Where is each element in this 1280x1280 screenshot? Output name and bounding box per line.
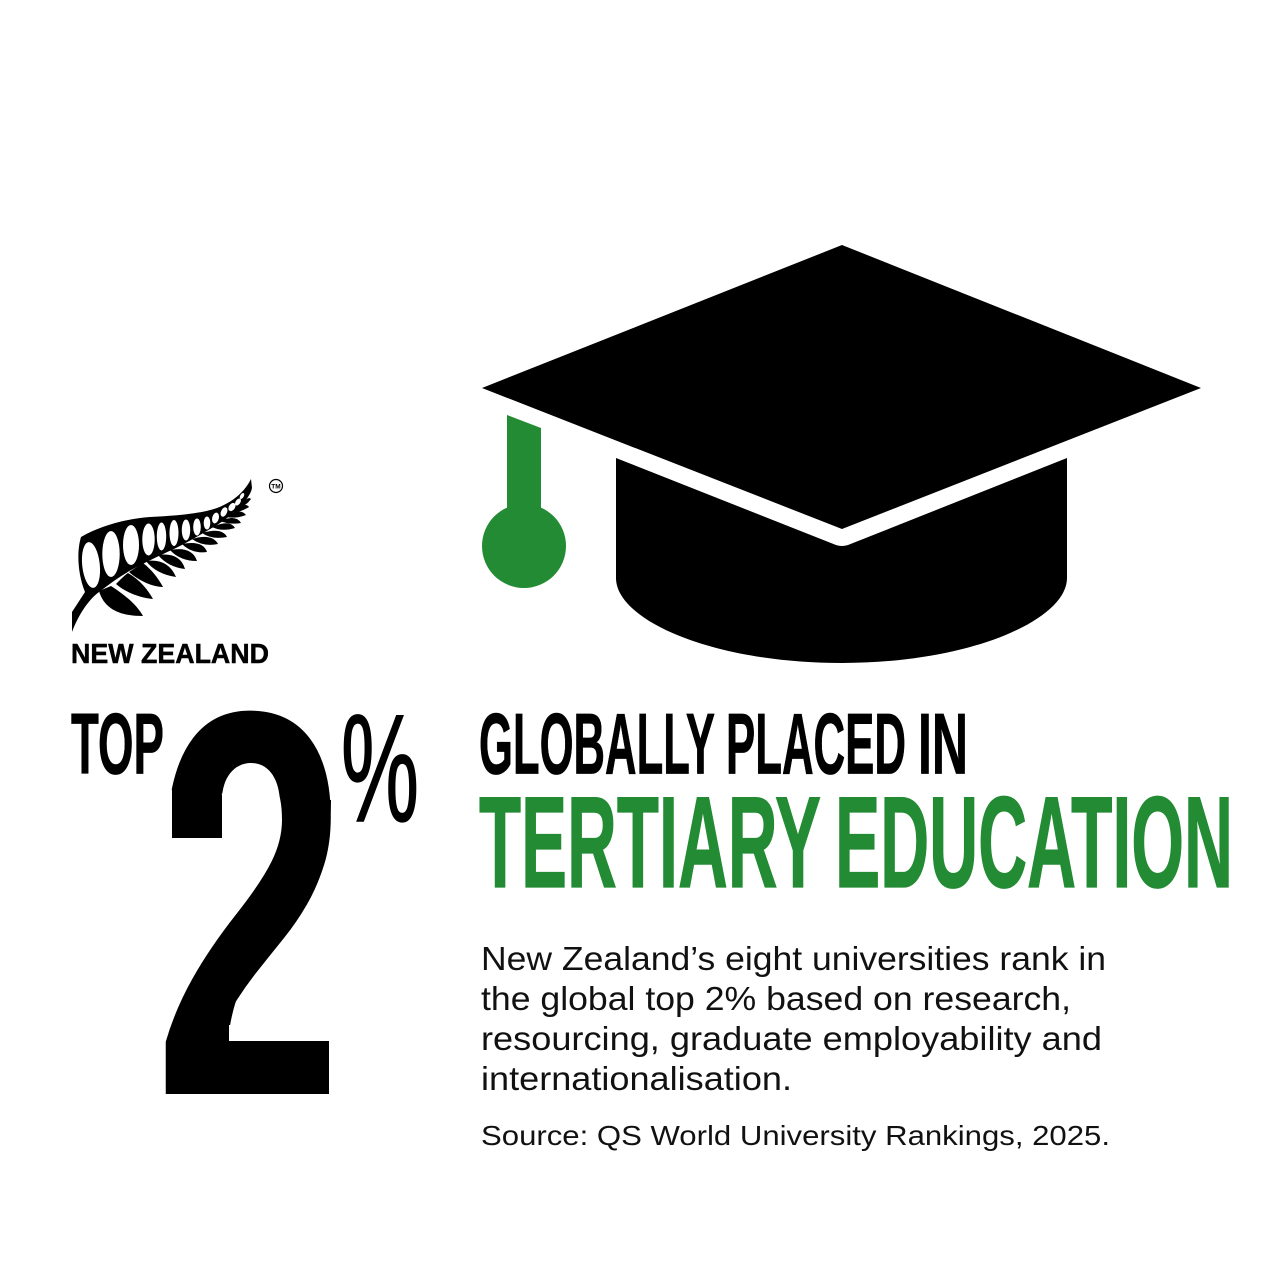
source note: Source: QS World University Rankings, 2025. xyxy=(481,1120,1110,1151)
body text: the global top 2% based on research, xyxy=(481,980,1071,1017)
big number: 2: 2 xyxy=(154,598,349,1211)
body text xyxy=(481,940,1106,1097)
label: TOP: TOP xyxy=(71,696,164,792)
heading: globally placed in: IN xyxy=(918,696,968,792)
heading: globally placed in: GLOBALLY xyxy=(479,696,715,792)
logo: silver fern New Zealand xyxy=(71,479,282,669)
body text: resourcing, graduate employability and xyxy=(481,1020,1102,1057)
logo: silver fern New Zealand: TM xyxy=(271,484,281,490)
body text: New Zealand’s eight universities rank in xyxy=(481,940,1106,977)
logo: silver fern New Zealand: NEW ZEALAND xyxy=(71,638,269,669)
heading: tertiary education: TERTIARY xyxy=(479,769,821,915)
percent sign: % xyxy=(341,683,419,854)
heading: globally placed in: PLACED xyxy=(726,696,906,792)
big number: 2 xyxy=(154,598,349,1211)
body text: internationalisation. xyxy=(481,1060,792,1097)
icon: graduation cap xyxy=(482,245,1201,663)
